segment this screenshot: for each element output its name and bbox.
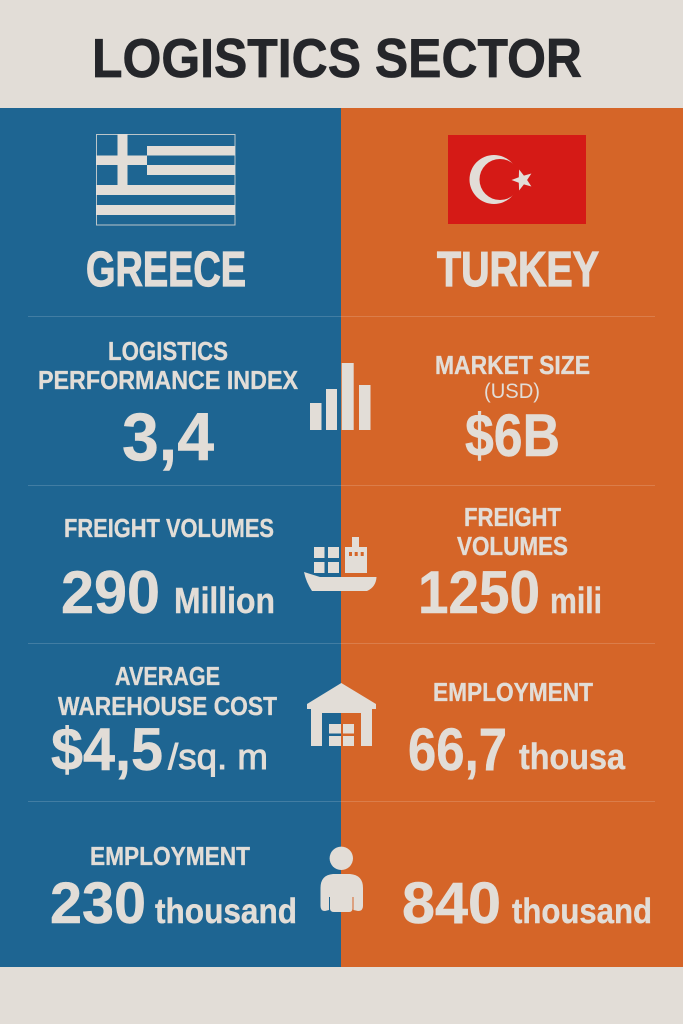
metric: average warehouse cost: AVERAGE bbox=[115, 661, 220, 691]
metric: Greece employment: 230 bbox=[50, 871, 146, 936]
metric: Turkey freight volumes: VOLUMES bbox=[457, 531, 568, 561]
metric: Turkey employment total bbox=[402, 871, 652, 936]
metric: average warehouse cost: WAREHOUSE COST bbox=[58, 691, 277, 721]
metric: market size: $6B bbox=[465, 402, 560, 469]
metric: Turkey freight volumes bbox=[418, 502, 602, 626]
metric: Turkey employment bbox=[408, 677, 626, 783]
metric: Turkey employment: 66,7 bbox=[408, 716, 507, 783]
metric: Greece freight volumes bbox=[61, 513, 275, 626]
icon: Greek flag bbox=[96, 134, 235, 225]
metric: Turkey freight volumes: mili bbox=[550, 580, 602, 621]
icon: person bbox=[320, 847, 363, 912]
icon: container ship bbox=[304, 537, 376, 591]
metric: Turkey freight volumes: 1250 bbox=[418, 559, 540, 626]
metric: Greece employment: EMPLOYMENT bbox=[90, 841, 250, 871]
metric: logistics performance index: LOGISTICS bbox=[108, 336, 228, 366]
metric: Greece freight volumes: Million bbox=[174, 580, 275, 621]
metric: Greece freight volumes: FREIGHT VOLUMES bbox=[64, 513, 274, 543]
panel: Turkey bbox=[341, 108, 683, 967]
metric: average warehouse cost: /sq. m bbox=[168, 736, 268, 777]
icon: Turkish flag bbox=[448, 135, 586, 224]
metric: average warehouse cost: $4,5 bbox=[51, 716, 163, 783]
panel: Greece bbox=[0, 108, 341, 967]
icon: warehouse bbox=[307, 683, 376, 746]
metric: average warehouse cost bbox=[51, 661, 277, 783]
heading: Turkey: TURKEY bbox=[437, 243, 599, 297]
metric: Greece freight volumes: 290 bbox=[61, 559, 160, 626]
metric: Turkey employment: thousa bbox=[519, 736, 626, 777]
metric: logistics performance index: 3,4 bbox=[122, 399, 214, 475]
metric: Turkey employment total: 840 bbox=[402, 871, 501, 936]
metric: market size bbox=[435, 350, 590, 469]
metric: logistics performance index bbox=[38, 336, 299, 475]
metric: Greece employment: thousand bbox=[155, 892, 297, 931]
icon: bar chart bbox=[310, 363, 370, 430]
metric: logistics performance index: PERFORMANCE INDEX bbox=[38, 365, 299, 395]
title: LOGISTICS SECTOR bbox=[92, 27, 582, 89]
metric: Turkey employment: EMPLOYMENT bbox=[433, 677, 593, 707]
metric: Greece employment bbox=[50, 841, 297, 936]
metric: Turkey freight volumes: FREIGHT bbox=[464, 502, 561, 532]
metric: market size: MARKET SIZE bbox=[435, 350, 590, 380]
metric: Turkey employment total: thousand bbox=[512, 892, 652, 931]
heading: Greece: GREECE bbox=[86, 243, 246, 297]
metric: market size: (USD) bbox=[484, 380, 540, 403]
